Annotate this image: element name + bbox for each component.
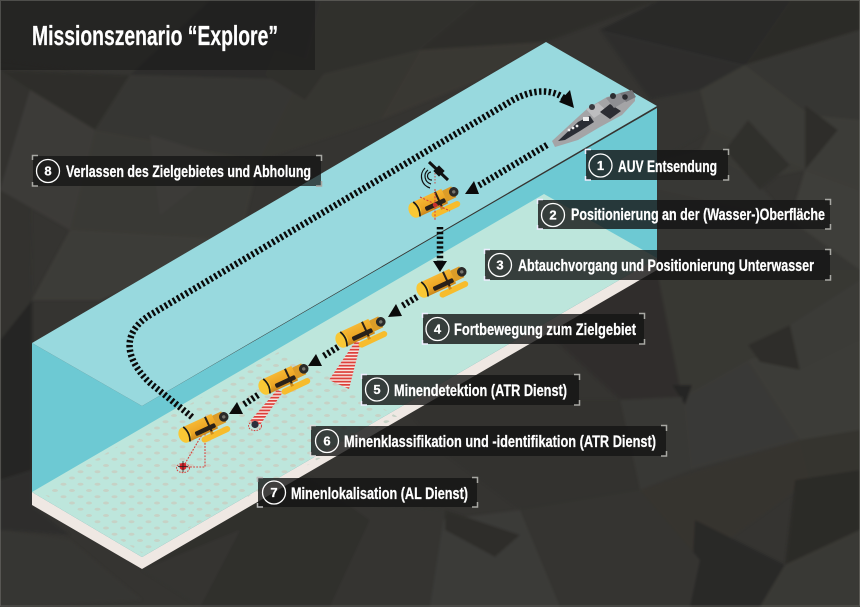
label 7	[258, 478, 478, 507]
arrow: classification to localisation	[229, 395, 258, 414]
label 8: Verlassen des Zielgebietes und Abholung	[66, 163, 311, 181]
seabed side edge	[32, 258, 657, 569]
label 6	[310, 426, 666, 456]
icon: ship	[552, 90, 636, 147]
AUV: localisation	[176, 408, 235, 452]
label 7: 7	[270, 485, 278, 500]
arrow: detection to classification	[308, 347, 338, 366]
label 7: Minenlokalisation (AL Dienst)	[291, 485, 468, 503]
seabed floor	[32, 194, 657, 557]
label 3	[484, 250, 830, 280]
sonar beam: classification	[248, 390, 283, 431]
label 6: 6	[323, 434, 331, 448]
label 8	[32, 156, 322, 186]
arrow: return loop to ship	[130, 90, 574, 417]
arrow: to target area	[388, 297, 417, 317]
localisation triangle and mine	[176, 433, 205, 473]
water front faces	[32, 108, 657, 557]
label 4: Fortbewegung zum Zielgebiet	[454, 321, 636, 339]
label 8: 8	[44, 164, 52, 178]
label 5	[362, 374, 580, 405]
label 1: 1	[597, 158, 604, 173]
label 1	[586, 150, 728, 180]
title bar	[0, 0, 315, 70]
label 3: 3	[496, 258, 504, 272]
water surface	[32, 42, 657, 406]
seabed dot pattern	[40, 350, 398, 553]
label 2: 2	[549, 208, 557, 222]
title text: Missionszenario “Explore”	[32, 20, 278, 51]
label 5: 5	[373, 382, 381, 397]
label 4	[422, 314, 644, 344]
AUV: detection	[333, 313, 392, 357]
water and seabed block	[32, 42, 657, 569]
AUV: classification	[256, 360, 315, 404]
label 6: Minenklassifikation und -identifikation (ATR Dienst)	[344, 433, 656, 451]
arrow: dive	[433, 227, 447, 272]
label 4: 4	[434, 322, 442, 336]
label 2	[538, 200, 830, 229]
arrow: ship to surface position	[465, 145, 547, 194]
AUV surface positioning cross	[420, 189, 450, 221]
AUV: diving	[414, 263, 473, 307]
label 1: AUV Entsendung	[618, 158, 717, 176]
label 5: Minendetektion (ATR Dienst)	[394, 382, 567, 400]
sonar beam: detection	[329, 339, 361, 389]
icon: satellite	[421, 162, 448, 188]
AUV: surface position	[406, 183, 465, 227]
